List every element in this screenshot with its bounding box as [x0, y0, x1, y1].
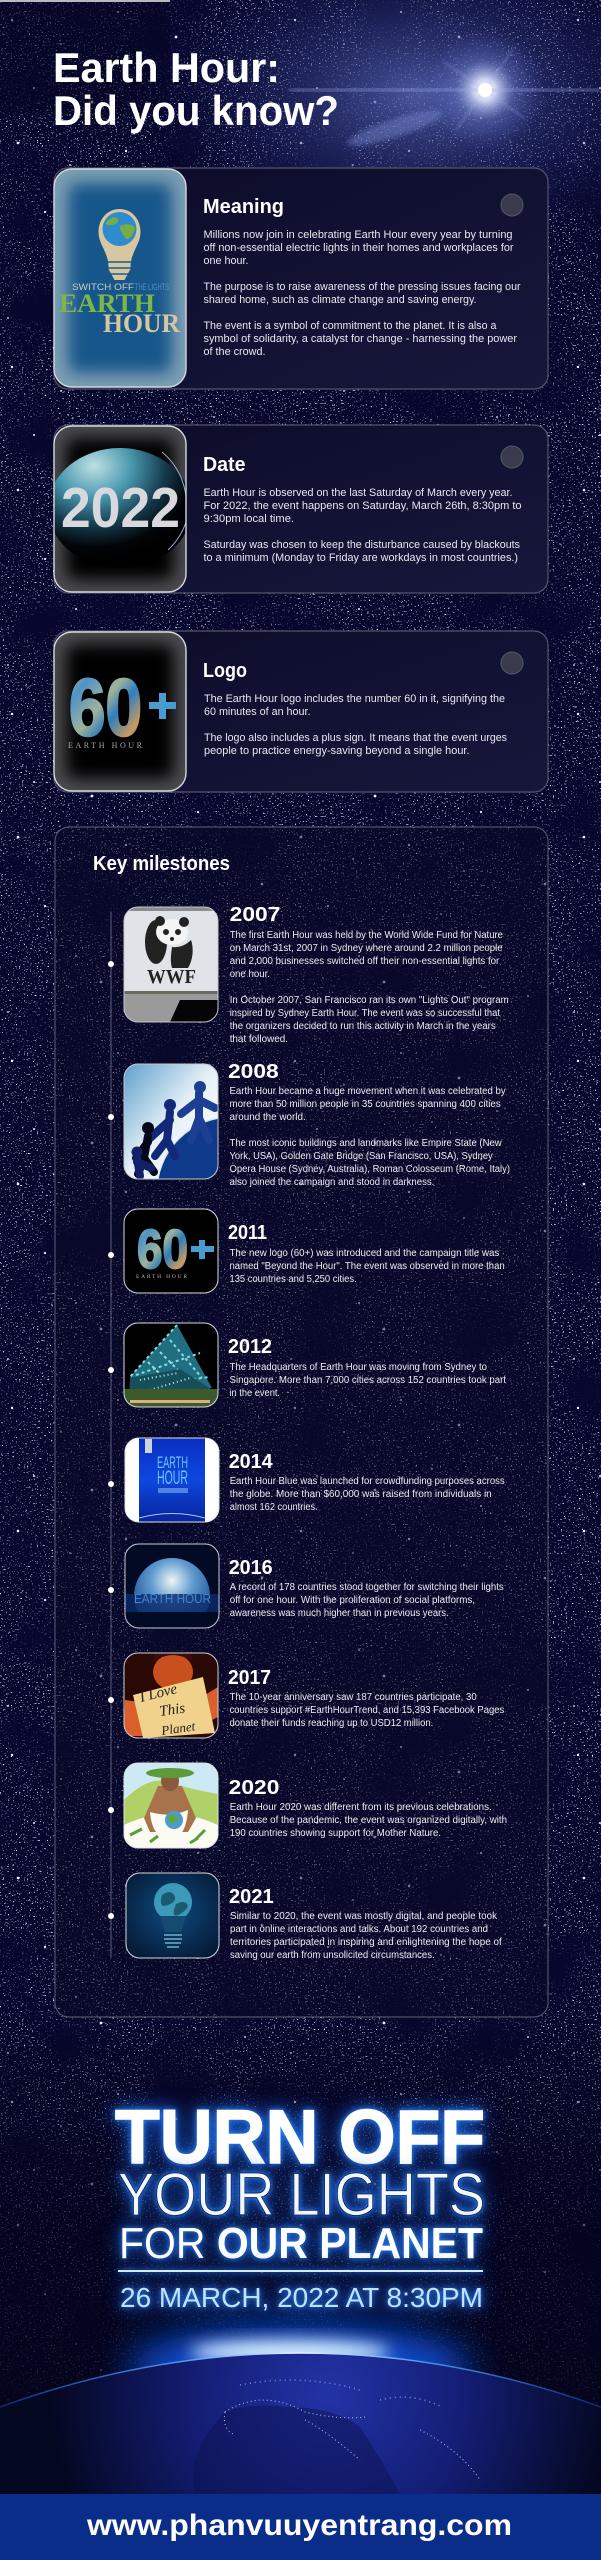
image: child with sign: I Love	[137, 1681, 179, 1706]
image: earth 2022: 2022	[61, 476, 180, 540]
text: meaning body: of the crowd.	[204, 346, 266, 358]
panel: date	[48, 425, 548, 593]
heading: meaning: Meaning	[203, 196, 284, 218]
text: 190 countries showing support for Mother Nature.	[230, 1828, 441, 1839]
image: 60+ logo: 60	[137, 1218, 188, 1280]
text: meaning body: symbol of solidarity, a catalyst for change - harnessing the power	[204, 333, 517, 345]
text: part in online interactions and talks. About 192 countries and	[230, 1924, 488, 1935]
text	[230, 1692, 504, 1729]
image: earth hour bulb logo: SWITCH OFF	[72, 282, 135, 292]
text: and 2,000 businesses switched off their non-essential lights for	[230, 956, 500, 967]
text: Earth Hour became a huge movement when it was celebrated by	[230, 1086, 506, 1097]
year: 2016	[229, 1557, 273, 1579]
panel: logo	[54, 631, 548, 792]
text: countries support #EarthHourTrend, and 15,393 Facebook Pages	[230, 1705, 504, 1716]
text	[230, 930, 509, 1045]
image: child with sign: This	[158, 1700, 186, 1720]
text: more than 50 million people in 35 countries spanning 400 cities	[230, 1099, 501, 1110]
image: wwf panda: WWF	[147, 966, 196, 988]
text: logo body: people to practice energy-saving beyond a single hour.	[204, 745, 470, 757]
text: meaning body: shared home, such as climate change and saving energy.	[204, 294, 476, 306]
image: child with sign	[124, 1653, 218, 1738]
text: around the world.	[230, 1112, 306, 1123]
text	[230, 1086, 510, 1188]
milestone: 2008	[124, 1064, 510, 1187]
title: Earth Hour:	[53, 44, 280, 91]
text	[230, 1362, 506, 1399]
text	[230, 1911, 502, 1961]
text: donate their funds reaching up to USD12 million.	[230, 1718, 433, 1729]
indicator dot	[501, 446, 523, 468]
image: earth hour bulb logo: EARTH	[59, 289, 155, 318]
image: wwf panda	[124, 907, 218, 1022]
year: 2017	[228, 1667, 271, 1689]
text: The Headquarters of Earth Hour was moving from Sydney to	[230, 1362, 487, 1373]
date line: 26 MARCH, 2022 AT 8:30PM	[120, 2282, 483, 2313]
text: also joined the campaign and stood in darkness.	[230, 1177, 434, 1188]
milestone: 2014	[125, 1438, 505, 1522]
text: logo body	[204, 693, 507, 757]
milestone: 2020	[124, 1763, 507, 1848]
text: meaning body: The purpose is to raise awareness of the pressing issues facing our	[204, 281, 521, 293]
year: 2012	[228, 1336, 272, 1358]
text: 135 countries and 5,250 cities.	[230, 1274, 357, 1285]
text: date body: Earth Hour is observed on the last Saturday of March every year.	[204, 487, 512, 499]
image: child with sign: Planet	[159, 1718, 196, 1738]
image: earth hour blue poster	[125, 1438, 219, 1522]
text: meaning body: The event is a symbol of commitment to the planet. It is also a	[204, 320, 497, 332]
text: The first Earth Hour was held by the World Wide Fund for Nature	[230, 930, 503, 941]
earth horizon	[0, 2325, 601, 2494]
text: logo body: 60 minutes of an hour.	[204, 706, 310, 718]
text: meaning body: Millions now join in celebrating Earth Hour every year by turning	[204, 229, 512, 241]
text: date body: to a minimum (Monday to Friday are workdays in most countries.)	[204, 552, 518, 564]
year: 2014	[229, 1451, 274, 1473]
image: 60+ logo	[54, 632, 186, 791]
website footer bar: www.phanvuuyentrang.com	[86, 2509, 512, 2542]
text: The most iconic buildings and landmarks like Empire State (New	[230, 1138, 502, 1149]
text: Opera House (Sydney, Australia), Roman Colosseum (Rome, Italy)	[230, 1164, 510, 1175]
title: Did you know?	[53, 87, 339, 134]
text: in the event.	[230, 1388, 280, 1399]
milestone: 2021	[126, 1873, 502, 1961]
panel: meaning	[54, 168, 548, 389]
image: 60+ logo: EARTH HOUR	[68, 741, 143, 750]
image: glowing globe bulb	[126, 1873, 219, 1958]
text	[230, 1476, 505, 1513]
milestone: 2011	[124, 1209, 505, 1293]
text: meaning body: off non-essential electric lights in their homes and workplaces for	[204, 242, 514, 254]
image: earth hour globe: EARTH HOUR	[134, 1591, 211, 1606]
text: named "Beyond the Hour". The event was observed in more than	[230, 1261, 505, 1272]
headline: for our planet: FOR OUR PLANET	[119, 2219, 483, 2268]
indicator dot	[501, 194, 523, 216]
panel: key milestones	[55, 827, 548, 2017]
website footer bar	[0, 2494, 601, 2560]
image: 60+ logo: 60	[69, 663, 142, 753]
text: Because of the pandemic, the event was organized digitally, with	[230, 1815, 507, 1826]
text: In October 2007, San Francisco ran its own "Lights Out" program	[230, 995, 509, 1006]
text: inspired by Sydney Earth Hour. The event was so successful that	[230, 1008, 500, 1019]
text: one hour.	[230, 969, 270, 980]
text: York, USA), Golden Gate Bridge (San Francisco, USA), Sydney	[230, 1151, 493, 1162]
year: 2020	[229, 1777, 279, 1799]
divider	[118, 2270, 483, 2272]
milestone: 2007	[124, 904, 509, 1045]
call to action	[115, 2095, 485, 2313]
image: earth hour bulb logo	[54, 169, 186, 387]
image: earth hour globe	[125, 1544, 219, 1634]
heading: logo: Logo	[203, 660, 247, 682]
text: Earth Hour Blue was launched for crowdfunding purposes across	[230, 1476, 505, 1487]
text: date body: For 2022, the event happens on Saturday, March 26th, 8:30pm to	[204, 500, 522, 512]
image: illuminated building	[124, 1323, 218, 1407]
text: date body: 9:30pm local time.	[204, 513, 294, 525]
text	[230, 1582, 504, 1619]
year: 2011	[228, 1222, 267, 1244]
image: mother nature	[124, 1763, 218, 1848]
text: awareness was much higher than in previous years.	[230, 1608, 449, 1619]
year: 2021	[229, 1886, 274, 1908]
text: A record of 178 countries stood together for switching their lights	[230, 1582, 504, 1593]
text: Similar to 2020, the event was mostly digital, and people took	[230, 1911, 498, 1922]
image: people climbing earth	[124, 1064, 218, 1178]
bright star flare	[150, 0, 601, 255]
headline: your lights: YOUR LIGHTS	[118, 2161, 485, 2228]
text: Earth Hour 2020 was different from its previous celebrations.	[230, 1802, 492, 1813]
image: earth 2022	[48, 426, 192, 592]
text: the organizers decided to run this activity in March in the years	[230, 1021, 496, 1032]
text: meaning body: one hour.	[204, 255, 248, 267]
text	[230, 1248, 505, 1285]
milestone: 2017	[124, 1653, 504, 1738]
text: logo body: The logo also includes a plus sign. It means that the event urges	[204, 732, 507, 744]
heading: date: Date	[203, 454, 246, 476]
text: date body: Saturday was chosen to keep the disturbance caused by blackouts	[204, 539, 520, 551]
image: earth hour bulb logo: THE LIGHTS	[135, 282, 169, 292]
headline: turn off: TURN OFF	[115, 2095, 485, 2180]
text: almost 162 countries.	[230, 1502, 318, 1513]
text: on March 31st, 2007 in Sydney where around 2.2 million people	[230, 943, 503, 954]
image: 60+ logo	[124, 1209, 218, 1293]
title	[53, 44, 339, 134]
text: saving our earth from unsolicited circumstances.	[230, 1950, 435, 1961]
text: off for one hour. With the proliferation of social platforms,	[230, 1595, 475, 1606]
text: logo body: The Earth Hour logo includes the number 60 in it, signifying the	[204, 693, 505, 705]
image: earth hour blue poster: EARTH	[157, 1453, 188, 1472]
image: earth hour bulb logo: HOUR	[103, 309, 180, 338]
milestone: 2012	[124, 1323, 506, 1407]
text: The new logo (60+) was introduced and the campaign title was	[230, 1248, 499, 1259]
text: that followed.	[230, 1034, 288, 1045]
text: meaning body	[204, 229, 521, 358]
image: earth hour blue poster: HOUR	[157, 1468, 188, 1489]
text: The 10-year anniversary saw 187 countries participate, 30	[230, 1692, 477, 1703]
image: 60+ logo: EARTH HOUR	[136, 1274, 187, 1280]
year: 2007	[230, 904, 280, 926]
text	[230, 1802, 507, 1839]
text: territories participated in inspiring and enlightening the hope of	[230, 1937, 502, 1948]
milestone: 2016	[125, 1544, 504, 1634]
text: date body	[204, 487, 522, 564]
year: 2008	[228, 1061, 279, 1083]
timeline	[108, 912, 114, 1958]
text: Singapore. More than 7,000 cities across 152 countries took part	[230, 1375, 506, 1386]
text: the globe. More than $60,000 was raised from individuals in	[230, 1489, 492, 1500]
indicator dot	[501, 652, 523, 674]
heading: key milestones: Key milestones	[93, 853, 230, 875]
